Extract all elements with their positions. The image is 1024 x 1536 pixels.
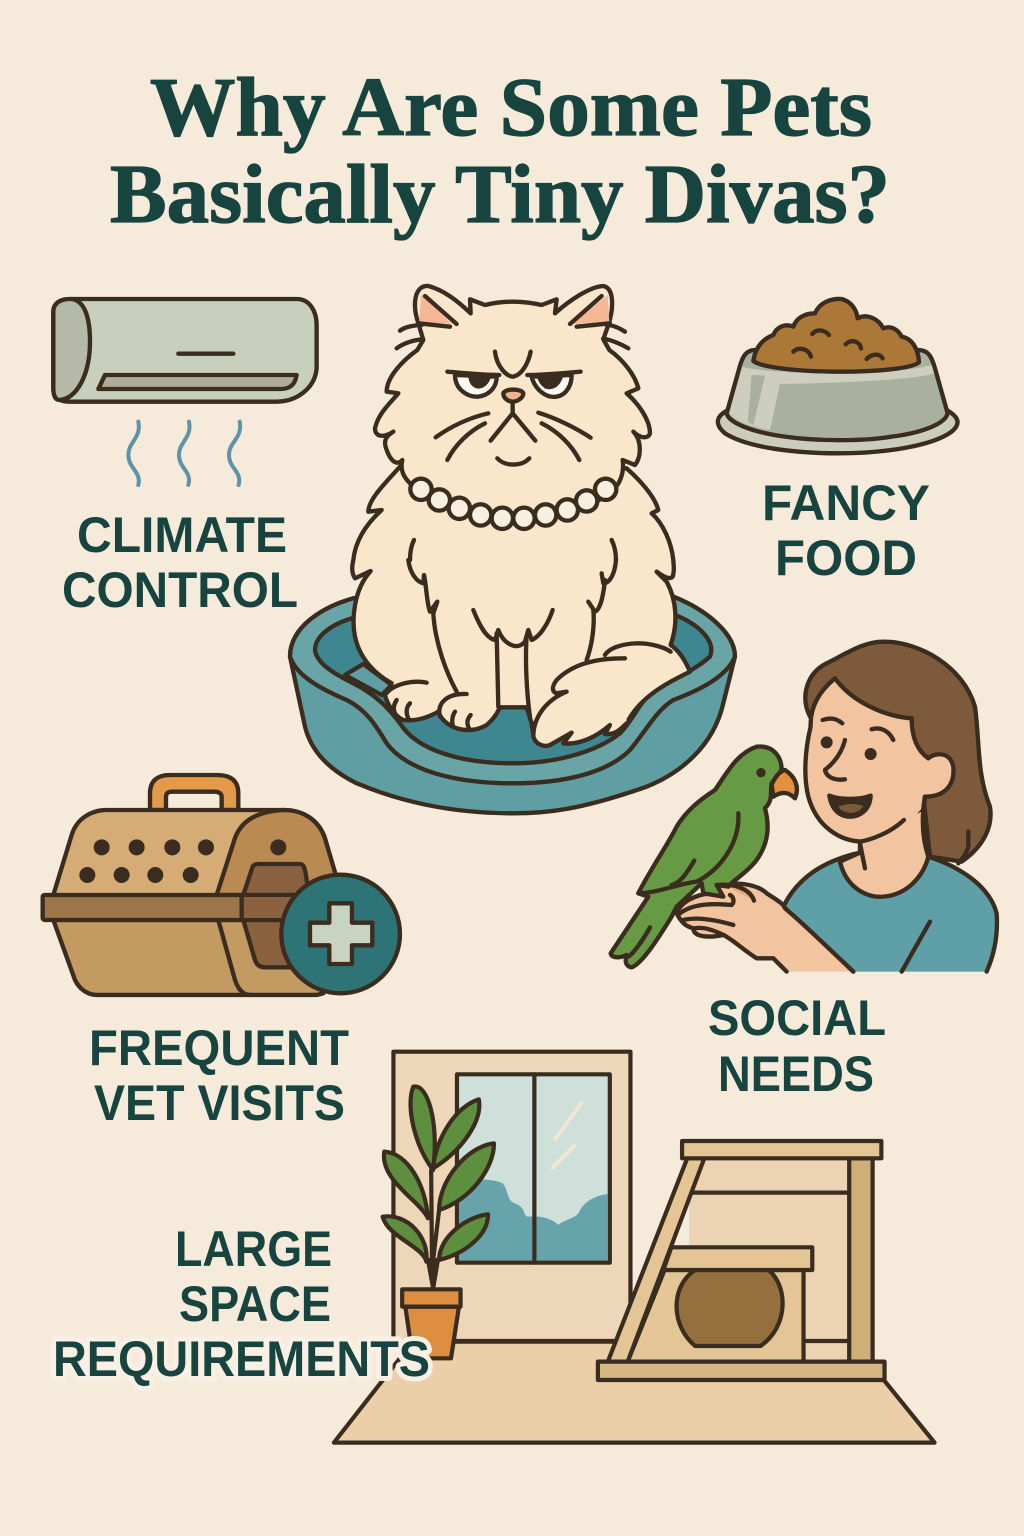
medical badge	[281, 875, 400, 993]
cat body	[352, 467, 690, 746]
pet bed	[290, 597, 735, 813]
potted plant	[383, 1086, 494, 1358]
parrot	[611, 746, 782, 967]
cat tree	[598, 1141, 885, 1380]
band	[43, 895, 309, 920]
label: frequent vet visits: VET VISITS	[94, 1075, 345, 1131]
wall	[393, 1052, 630, 1341]
neck	[840, 803, 928, 897]
label: climate control	[62, 507, 298, 618]
label: social needs: SOCIAL	[708, 990, 886, 1046]
label: fancy food: FANCY	[762, 475, 930, 531]
label: large space requirements: SPACE	[179, 1276, 331, 1332]
illustration: room with cat tree and plant	[334, 1052, 935, 1443]
label: frequent vet visits: FREQUENT	[89, 1020, 349, 1076]
title: Why Are Some Pets	[150, 61, 872, 154]
door	[243, 920, 307, 967]
label: large space requirements: LARGE	[175, 1221, 332, 1277]
label: social needs	[708, 990, 886, 1102]
face	[805, 678, 954, 842]
label: fancy food: FOOD	[775, 530, 917, 586]
carrier shell	[53, 920, 323, 995]
ears	[419, 294, 609, 324]
hair	[805, 642, 991, 862]
pearl necklace	[410, 479, 616, 529]
label: climate control: CONTROL	[62, 562, 298, 618]
floor	[334, 1342, 935, 1443]
icon: food bowl	[718, 299, 958, 453]
fingers	[730, 887, 753, 899]
title	[110, 61, 890, 241]
cat head with pearl necklace	[375, 286, 650, 560]
label: large space requirements	[53, 1221, 430, 1387]
window	[457, 1074, 610, 1263]
label: large space requirements: REQUIREMENTS	[53, 1331, 430, 1387]
icon: pet carrier with medical badge	[43, 775, 400, 995]
icon: air conditioner	[53, 299, 317, 485]
illustration: woman with parrot	[611, 642, 997, 972]
title: Basically Tiny Divas?	[110, 148, 890, 241]
handle	[150, 775, 238, 810]
hand	[677, 883, 853, 972]
label: frequent vet visits	[89, 1020, 349, 1131]
illustration: cat on bed	[290, 286, 735, 813]
face	[495, 352, 531, 377]
air holes	[79, 839, 286, 883]
label: climate control: CLIMATE	[77, 507, 287, 563]
label: social needs: NEEDS	[718, 1046, 874, 1102]
label: fancy food	[762, 475, 930, 586]
shirt	[783, 853, 997, 972]
